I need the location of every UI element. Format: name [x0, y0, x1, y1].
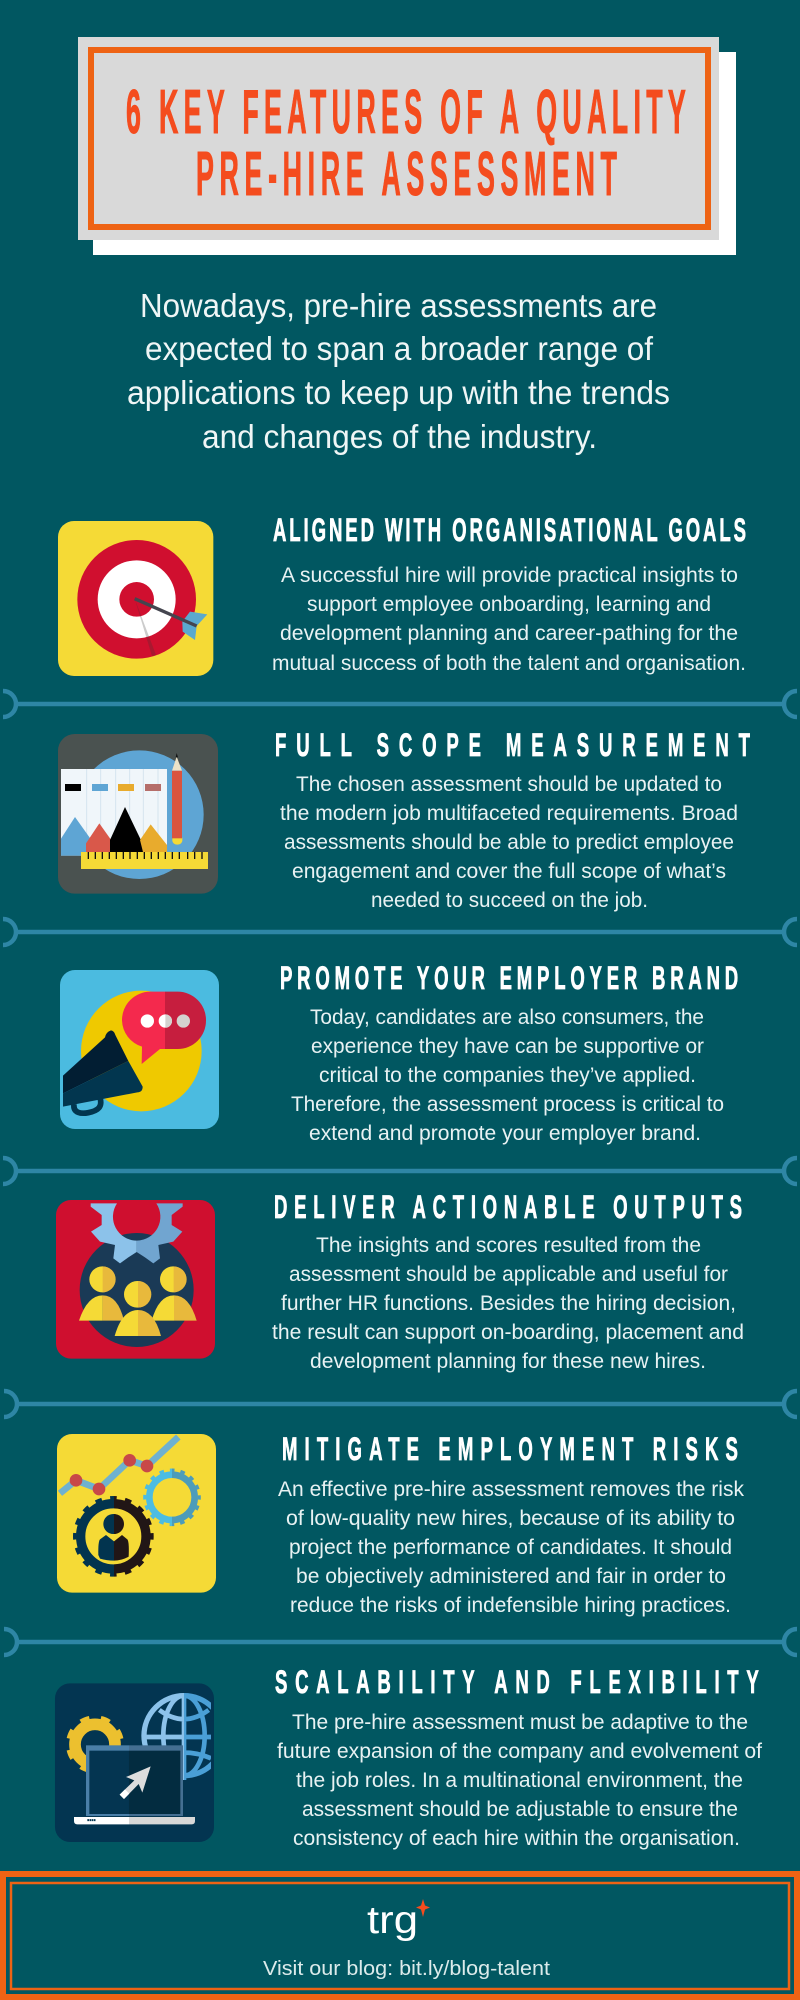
body text: mutual success of both the talent and organisation. — [272, 651, 746, 675]
heading: PROMOTE YOUR EMPLOYER BRAND — [280, 960, 738, 996]
footer panel — [3, 1874, 797, 1997]
body text: be objectively administered and fair in order to — [296, 1564, 726, 1588]
body text: the result can support on-boarding, placement and — [272, 1320, 744, 1344]
intro text: and changes of the industry. — [202, 418, 597, 455]
intro text: expected to span a broader range of — [145, 330, 654, 367]
body text: Today, candidates are also consumers, the — [310, 1005, 704, 1029]
body text: critical to the companies they’ve applied. — [319, 1063, 696, 1087]
body text: development planning for these new hires. — [310, 1349, 706, 1373]
icon: megaphone and speech bubble — [60, 970, 219, 1129]
panel: mitigate employment risks — [57, 1431, 744, 1617]
intro text: Nowadays, pre-hire assessments are — [140, 287, 657, 324]
body text: the modern job multifaceted requirements. Broad — [280, 801, 738, 825]
body text: future expansion of the company and evolvement of — [277, 1739, 762, 1763]
body text: Therefore, the assessment process is critical to — [291, 1092, 724, 1116]
body text: project the performance of candidates. It should — [289, 1535, 732, 1559]
title line 1: 6 KEY FEATURES OF A QUALITY — [126, 77, 686, 147]
body text: The chosen assessment should be updated to — [296, 772, 722, 796]
body text: assessments should be able to predict employee — [284, 830, 734, 854]
icon: laptop, globe and gear — [55, 1683, 227, 1842]
logo: trg: trg — [367, 1899, 418, 1942]
body text: An effective pre-hire assessment removes the risk — [278, 1477, 744, 1501]
panel: aligned with organisational goals — [58, 512, 746, 676]
blog link: Visit our blog: bit.ly/blog-talent — [263, 1958, 550, 1980]
body text — [272, 1233, 744, 1373]
body text — [291, 1005, 724, 1145]
icon: target with arrow — [58, 521, 213, 676]
body text — [272, 563, 746, 675]
body text — [280, 772, 738, 912]
body text: assessment should be applicable and useful for — [289, 1262, 728, 1286]
icon: gears and growth line — [57, 1434, 216, 1593]
intro text: applications to keep up with the trends — [127, 374, 670, 411]
body text: the job roles. In a multinational environment, the — [296, 1768, 743, 1792]
heading: MITIGATE EMPLOYMENT RISKS — [282, 1431, 738, 1467]
heading: FULL SCOPE MEASUREMENT — [275, 727, 750, 763]
body text: The pre-hire assessment must be adaptive to the — [292, 1710, 748, 1734]
panel: full scope measurement — [58, 727, 750, 912]
body text: development planning and career-pathing for the — [280, 621, 738, 645]
title banner — [78, 37, 736, 255]
body text — [278, 1477, 744, 1617]
body text: assessment should be adjustable to ensure the — [302, 1797, 738, 1821]
icon: gear and team — [56, 1200, 215, 1359]
panel: scalability and flexibility — [55, 1664, 762, 1850]
body text: engagement and cover the full scope of what’s — [292, 859, 726, 883]
body text: consistency of each hire within the organisation. — [293, 1826, 740, 1850]
heading: SCALABILITY AND FLEXIBILITY — [275, 1664, 759, 1700]
body text: The insights and scores resulted from the — [316, 1233, 701, 1257]
body text: further HR functions. Besides the hiring decision, — [281, 1291, 736, 1315]
body text: A successful hire will provide practical insights to — [281, 563, 738, 587]
body text: of low-quality new hires, because of its ability to — [286, 1506, 735, 1530]
body text — [277, 1710, 762, 1850]
body text: reduce the risks of indefensible hiring practices. — [290, 1593, 731, 1617]
intro text — [127, 287, 670, 455]
panel: deliver actionable outputs — [56, 1189, 744, 1373]
body text: experience they have can be supportive or — [311, 1034, 704, 1058]
body text: needed to succeed on the job. — [371, 888, 648, 912]
icon: chart with pencil and ruler — [58, 734, 218, 894]
panel: promote your employer brand — [60, 960, 738, 1145]
body text: extend and promote your employer brand. — [309, 1121, 701, 1145]
heading: ALIGNED WITH ORGANISATIONAL GOALS — [273, 512, 746, 548]
body text: support employee onboarding, learning and — [307, 592, 711, 616]
title line 2: PRE-HIRE ASSESSMENT — [196, 139, 617, 209]
heading: DELIVER ACTIONABLE OUTPUTS — [274, 1189, 742, 1225]
